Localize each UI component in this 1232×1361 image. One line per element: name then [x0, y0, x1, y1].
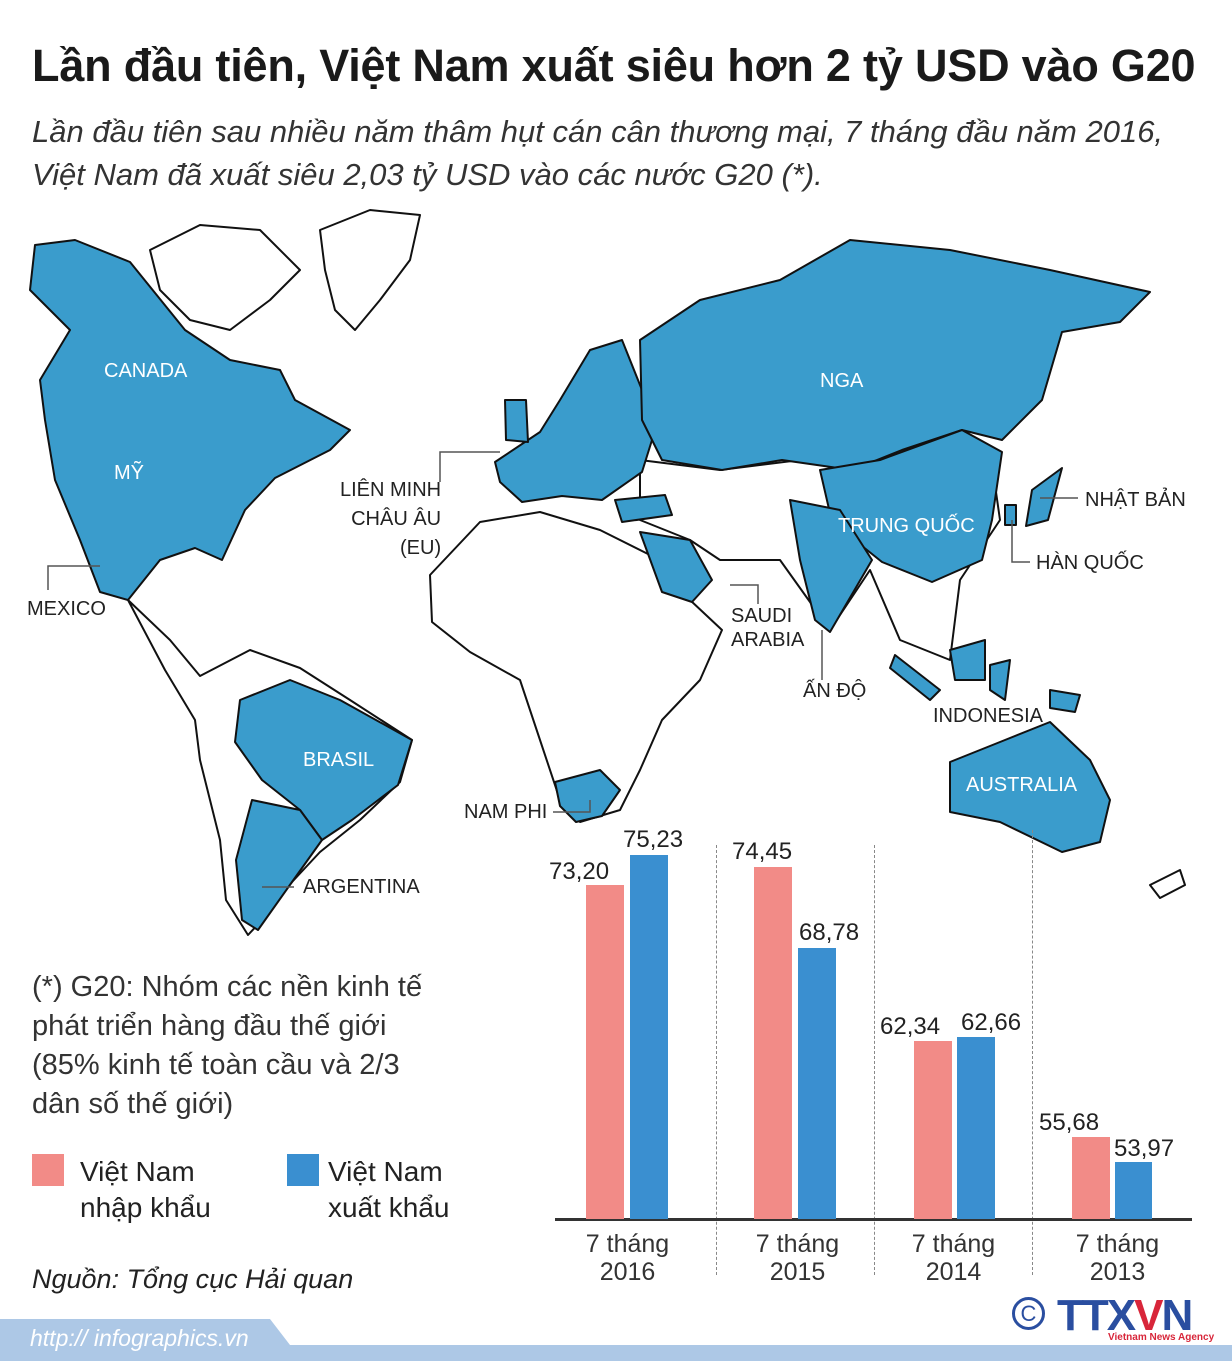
title: Lần đầu tiên, Việt Nam xuất siêu hơn 2 tỷ USD vào G20: [32, 40, 1195, 91]
bar chart: [549, 826, 1192, 1286]
logo: TTXVN: TTXVN: [1057, 1291, 1191, 1340]
text: AUSTRALIA: [966, 774, 1077, 796]
bar chart: 7 tháng: [756, 1230, 839, 1258]
footnote: [32, 971, 422, 1120]
footnote: (*) G20: Nhóm các nền kinh tế: [32, 971, 422, 1003]
text: ẤN ĐỘ: [803, 680, 866, 702]
text: BRASIL: [303, 749, 374, 771]
legend: export: [287, 1154, 319, 1186]
bar chart: 7 tháng: [912, 1230, 995, 1258]
world map: [29, 209, 1186, 936]
bar chart: 55,68: [1039, 1109, 1099, 1136]
logo: TTXVN: [1012, 1291, 1214, 1343]
subtitle: [32, 114, 1163, 192]
text: NHẬT BẢN: [1085, 489, 1186, 511]
legend: [32, 1154, 449, 1223]
text: ARABIA: [731, 629, 804, 651]
footnote: dân số thế giới): [32, 1088, 233, 1120]
legend: Việt Nam: [328, 1156, 443, 1187]
bar chart: 2013: [1090, 1258, 1145, 1286]
legend: nhập khẩu: [80, 1192, 211, 1223]
logo: TTXVN: Vietnam News Agency: [1108, 1332, 1214, 1343]
legend: xuất khẩu: [328, 1192, 449, 1223]
subtitle: Việt Nam đã xuất siêu 2,03 tỷ USD vào các nước G20 (*).: [32, 157, 823, 192]
text: INDONESIA: [933, 705, 1043, 727]
text: MEXICO: [27, 598, 106, 620]
bar chart: 62,66: [961, 1009, 1021, 1036]
bar chart: 2014: [926, 1258, 981, 1286]
bar chart: 75,23: [623, 826, 683, 853]
text: TRUNG QUỐC: [838, 515, 975, 537]
text: NGA: [820, 370, 863, 392]
bar chart: 7 tháng: [1076, 1230, 1159, 1258]
legend: import: [32, 1154, 64, 1186]
subtitle: Lần đầu tiên sau nhiều năm thâm hụt cán cân thương mại, 7 tháng đầu năm 2016,: [32, 114, 1163, 149]
text: CHÂU ÂU: [351, 508, 441, 530]
bar chart: 68,78: [799, 919, 859, 946]
bar chart: 73,20: [549, 858, 609, 885]
bar chart: 74,45: [732, 838, 792, 865]
bar chart: 62,34: [880, 1013, 940, 1040]
bar chart: 7 tháng: [586, 1230, 669, 1258]
footer bar: http:// infographics.vn: [30, 1325, 249, 1351]
source: Nguồn: Tổng cục Hải quan: [32, 1264, 353, 1294]
text: (EU): [400, 537, 441, 559]
bar chart: 2015: [770, 1258, 825, 1286]
text: SAUDI: [731, 605, 792, 627]
bar chart: 53,97: [1114, 1135, 1174, 1162]
footer bar: [0, 1319, 1232, 1361]
text: NAM PHI: [464, 801, 547, 823]
text: ARGENTINA: [303, 876, 420, 898]
footnote: (85% kinh tế toàn cầu và 2/3: [32, 1049, 400, 1081]
text: LIÊN MINH: [340, 479, 441, 501]
map labels: CANADA: [104, 360, 187, 382]
footnote: phát triển hàng đầu thế giới: [32, 1010, 386, 1042]
text: MỸ: [114, 462, 144, 484]
logo: TTXVN: C: [1021, 1301, 1036, 1326]
legend: Việt Nam: [80, 1156, 195, 1187]
text: HÀN QUỐC: [1036, 552, 1144, 574]
bar chart: 2016: [600, 1258, 655, 1286]
